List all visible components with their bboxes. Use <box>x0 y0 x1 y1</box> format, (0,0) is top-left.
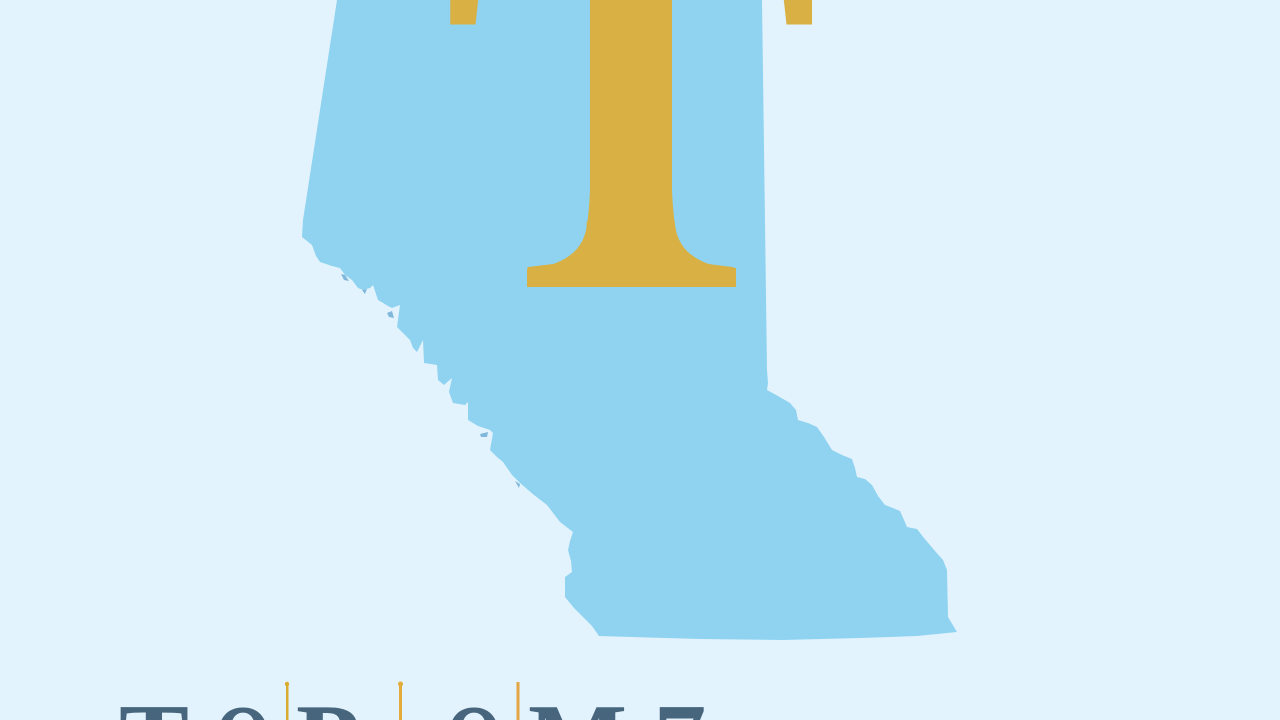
marker: gold pin 1 <box>285 682 289 720</box>
marker: gold pin 3 <box>516 682 520 720</box>
heading: partially visible title <box>119 682 706 720</box>
map: Alberta silhouette <box>302 0 957 640</box>
marker: gold pin 2 <box>398 682 403 720</box>
